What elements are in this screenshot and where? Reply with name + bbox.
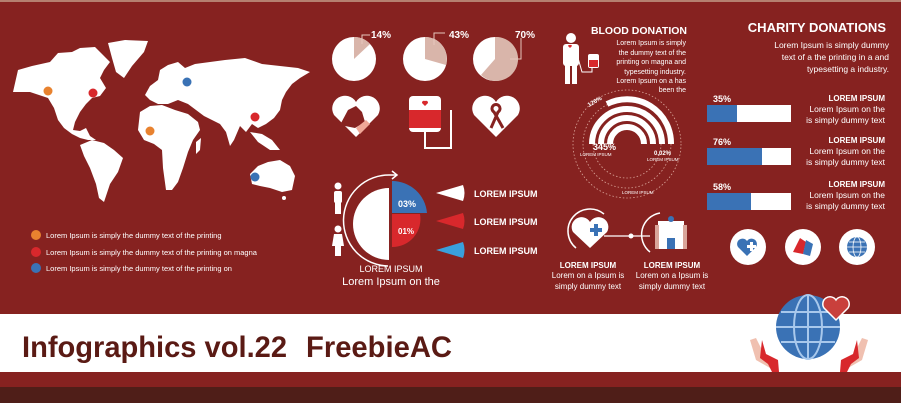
icon: blood bag [409,96,451,148]
bar chart: Lorem Ipsum on the [809,190,885,200]
blood donation heading: BLOOD DONATION [591,25,687,37]
footer band [0,314,901,372]
charity heading: CHARITY DONATIONS [748,20,886,35]
blood donation text: printing on magna and [616,59,686,66]
pointer labels: LOREM IPSUM [474,246,538,256]
icon: globe with hands [750,295,868,372]
blood donation text: Lorem Ipsum on a has [616,78,686,85]
charity text: typesetting a industry. [807,64,889,74]
bar chart: is simply dummy text [806,201,886,211]
pie charts: 70% [515,30,535,41]
icon: heart hand [332,96,380,137]
radial chart: LOREM IPSUM [647,157,679,162]
bar chart: LOREM IPSUM [829,180,885,189]
pie charts [332,30,535,81]
radial chart: LOREM IPSUM [622,190,654,195]
charity text: text of a the printing in a and [782,52,889,62]
icon: ribbon heart [472,96,520,137]
semi pie chart: 03% [398,199,416,209]
captions: LOREM IPSUM [560,261,617,270]
bar chart: is simply dummy text [806,157,886,167]
pointer labels: LOREM IPSUM [474,189,538,199]
radial chart: LOREM IPSUM [580,152,612,157]
map legend: Lorem Ipsum is simply the dummy text of the printing [46,231,222,240]
pie caption [342,264,440,288]
pie charts: 43% [449,30,469,41]
title [22,331,452,364]
charity text: Lorem Ipsum is simply dummy [774,40,890,50]
pie charts: 14% [371,30,391,41]
charity text [774,40,890,74]
bar chart: 58% [713,182,731,192]
world map [13,40,310,202]
blood donation text [616,40,686,94]
blood donation text: been the [659,87,686,94]
captions: simply dummy text [639,282,706,291]
map legend [31,230,258,273]
pie caption: LOREM IPSUM [359,264,423,274]
radial chart: 0,02% [654,151,672,157]
heart + building icons [568,209,687,252]
semi pie chart: 01% [398,227,414,236]
bar chart: Lorem Ipsum on the [809,146,885,156]
bar chart: Lorem Ipsum on the [809,104,885,114]
captions: Lorem on a Ipsum is [636,271,708,280]
radial chart [573,90,681,198]
bar chart: LOREM IPSUM [829,136,885,145]
captions [552,261,708,291]
map dots [44,78,260,182]
blood donation text: Lorem Ipsum is simply [616,40,686,47]
map legend: Lorem Ipsum is simply the dummy text of the printing on [46,264,232,273]
pointer labels: LOREM IPSUM [474,217,538,227]
bar chart: is simply dummy text [806,115,886,125]
icon: donor person [563,33,599,84]
charity icons [730,229,875,265]
bar chart: LOREM IPSUM [829,94,885,103]
captions: simply dummy text [555,282,622,291]
radial chart: 126% [587,96,604,109]
blood donation text: the dummy text of the [619,50,686,57]
bar chart [707,94,886,211]
title: FreebieAC [306,331,452,364]
captions: LOREM IPSUM [644,261,701,270]
title: Infographics vol.22 [22,331,287,364]
pie caption: Lorem Ipsum on the [342,276,440,288]
map legend: Lorem Ipsum is simply the dummy text of the printing on magna [46,248,258,257]
captions: Lorem on a Ipsum is [552,271,624,280]
pointer labels [436,185,538,258]
blood donation text: typesetting industry. [624,69,686,76]
bar chart: 35% [713,94,731,104]
people icons [332,182,344,256]
semi pie chart [344,171,427,266]
bar chart: 76% [713,137,731,147]
radial chart: 345% [593,142,616,152]
